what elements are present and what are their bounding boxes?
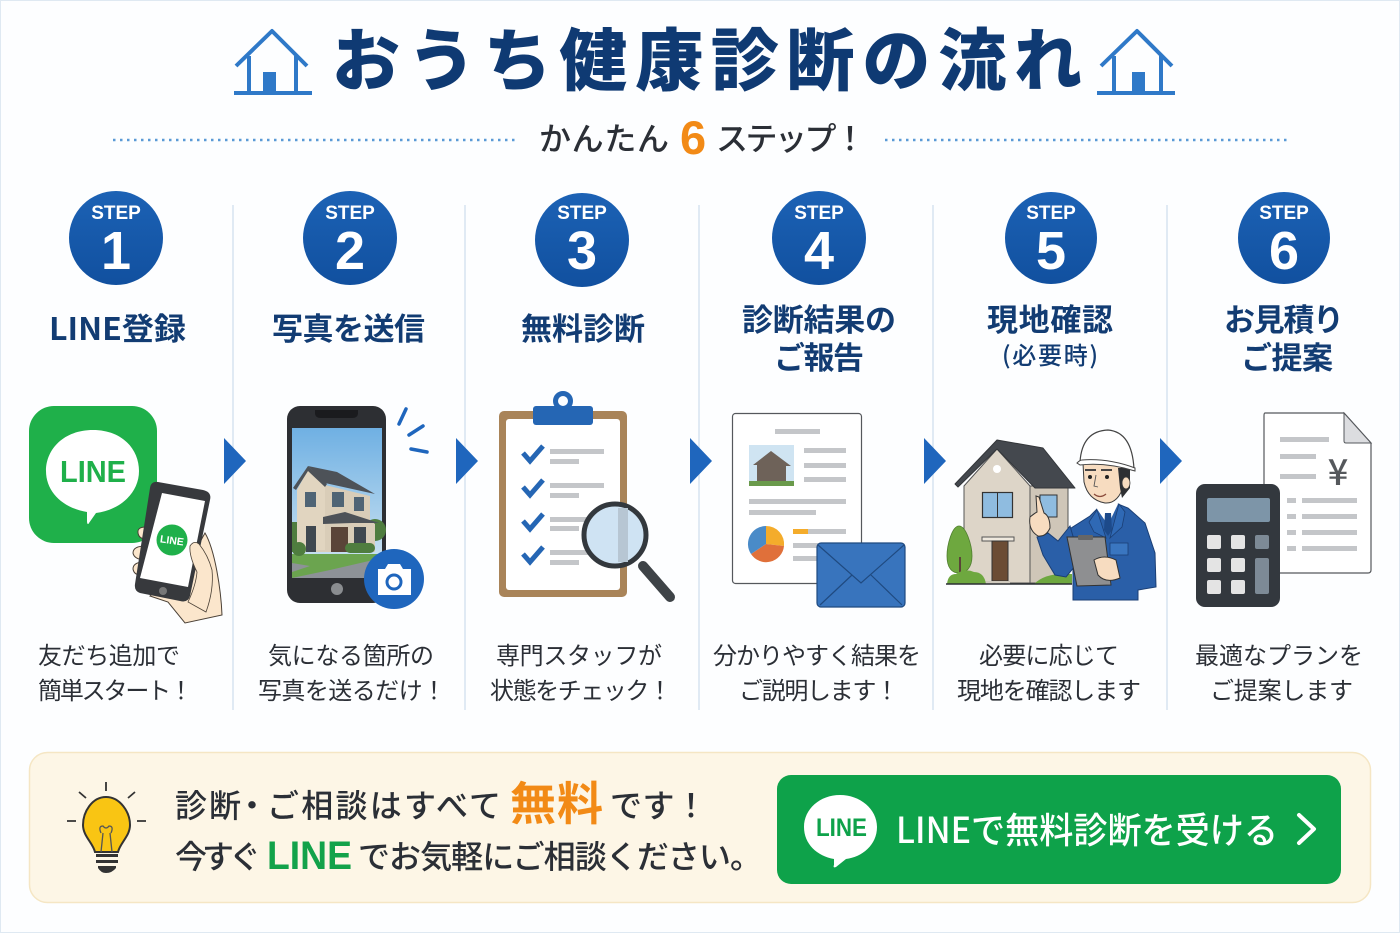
step 1 badge: STEP: [91, 203, 141, 224]
icon: estimate document and calculator: [1196, 413, 1371, 607]
heading step 3: 無料診断: [521, 304, 645, 349]
text step 2: 写真を送るだけ！: [258, 671, 446, 706]
step 1 badge: 1: [101, 221, 131, 281]
icon: house and inspector: [946, 430, 1156, 600]
heading step 5: (必要時): [1002, 336, 1098, 371]
step 5 badge: STEP: [1026, 203, 1076, 224]
cta text: です！: [610, 781, 707, 827]
panel: free consultation call to action: [30, 752, 1370, 902]
arrow 5 to 6: [1160, 438, 1182, 484]
cta text: 無料: [510, 768, 603, 834]
text step 5: [957, 636, 1141, 706]
heading step 2: 写真を送信: [272, 304, 425, 349]
step 2 badge: 2: [335, 221, 365, 281]
arrow 3 to 4: [690, 438, 712, 484]
cta text: ・: [236, 781, 268, 827]
step 5 badge: [1005, 192, 1097, 284]
heading step 5: 現地確認: [987, 295, 1113, 340]
button: LINE free diagnosis: LINE: [816, 814, 867, 842]
text step 6: [1195, 636, 1363, 706]
icon: smartphone with house photo: [287, 406, 427, 609]
subtitle: ステップ！: [716, 114, 866, 160]
button: LINE free diagnosis: [777, 775, 1341, 884]
text step 1: [38, 636, 193, 706]
step 4 badge: STEP: [794, 203, 844, 224]
title: おうち健康診断の流れ: [332, 6, 1082, 105]
subtitle: かんたん: [539, 114, 669, 160]
heading step 1: LINE登録: [49, 304, 186, 349]
button: LINE free diagnosis: LINEで無料診断を受ける: [896, 802, 1278, 854]
step 4 badge: 4: [804, 221, 834, 281]
heading step 6: お見積り: [1224, 295, 1344, 340]
icon: house right: [1097, 31, 1175, 93]
cta text: LINE: [267, 834, 352, 878]
text step 1: 友だち追加で: [38, 636, 180, 671]
heading step 4: [742, 295, 896, 378]
text step 6: ご提案します: [1210, 671, 1353, 706]
cta text: でお気軽にご相談ください。: [358, 832, 762, 878]
inspector figure: [1030, 430, 1156, 600]
step 6 badge: STEP: [1259, 203, 1309, 224]
subtitle: 6: [680, 111, 706, 164]
text step 1: 簡単スタート！: [38, 671, 193, 706]
icon: house left: [234, 31, 312, 93]
icon: estimate document and calculator: ¥: [1328, 444, 1348, 496]
text step 6: 最適なプランを: [1195, 636, 1363, 671]
text step 2: 気になる箇所の: [268, 636, 434, 671]
text step 5: 現地を確認します: [957, 671, 1141, 706]
text step 3: 状態をチェック！: [490, 671, 672, 706]
step 3 badge: [535, 193, 629, 287]
step 6 badge: 6: [1269, 221, 1299, 281]
heading step 4: ご報告: [774, 333, 864, 378]
arrow 4 to 5: [924, 438, 946, 484]
cta text: [175, 768, 762, 878]
cta text: 診断: [175, 781, 241, 827]
column dividers: [233, 205, 1167, 710]
step 4 badge: [772, 191, 866, 285]
step 3 badge: STEP: [557, 203, 607, 224]
step 1 badge: [69, 191, 163, 285]
cta text: ご相談はすべて: [267, 781, 501, 827]
icon: LINE app and phone in hand: [29, 406, 222, 623]
icon: LINE app and phone in hand: LINE: [159, 533, 185, 549]
text step 2: [258, 636, 446, 706]
subtitle: [113, 111, 1288, 164]
icon: light bulb: [67, 782, 146, 873]
cta text: 今すぐ: [175, 832, 261, 878]
text step 5: 必要に応じて: [979, 636, 1119, 671]
heading step 4: 診断結果の: [742, 295, 896, 340]
text step 4: [713, 636, 921, 706]
text step 4: 分かりやすく結果を: [713, 636, 921, 671]
step 6 badge: [1238, 192, 1330, 284]
text step 3: 専門スタッフが: [496, 636, 662, 671]
text step 4: ご説明します！: [739, 671, 899, 706]
heading step 6: ご提案: [1241, 333, 1333, 378]
step 2 badge: STEP: [325, 203, 375, 224]
arrow 1 to 2: [224, 438, 246, 484]
arrow 2 to 3: [456, 438, 478, 484]
text step 3: [490, 636, 672, 706]
heading step 6: [1224, 295, 1344, 378]
step 2 badge: [303, 191, 397, 285]
icon: report and envelope: [732, 414, 905, 607]
heading step 5: [987, 295, 1113, 371]
icon: LINE app and phone in hand: LINE: [60, 454, 126, 489]
step 5 badge: 5: [1036, 221, 1066, 281]
icon: clipboard checklist with magnifier: [499, 394, 670, 597]
step 3 badge: 3: [567, 221, 597, 281]
